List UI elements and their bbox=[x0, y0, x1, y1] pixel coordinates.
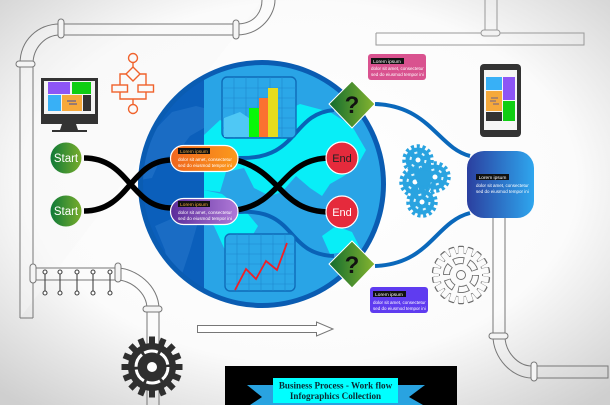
chart: bar chart panel bbox=[222, 77, 296, 138]
decision diamond upper bbox=[329, 81, 375, 128]
chart: line chart panel bbox=[225, 234, 295, 291]
callout: purple: dolor sit amet, consectetur bbox=[178, 210, 232, 215]
callout: pink: dolor sit amet, consectetur bbox=[371, 66, 424, 71]
callout: violet: sed do eiusmod tempor ini bbox=[373, 306, 426, 311]
callout: orange: dolor sit amet, consectetur bbox=[178, 157, 232, 162]
end node 2: End bbox=[332, 207, 352, 219]
callout: pink: Lorem ipsum bbox=[373, 59, 401, 65]
blue rounded info box: Lorem ipsum bbox=[479, 175, 506, 181]
callout: orange bbox=[170, 146, 238, 172]
workflow lines bbox=[84, 158, 330, 212]
pipe: top right bbox=[376, 0, 584, 45]
callout: violet: dolor sit amet, consectetur bbox=[373, 300, 426, 305]
start node 1: Start bbox=[54, 153, 79, 165]
end node 2 bbox=[326, 196, 358, 228]
pipe: top left bbox=[16, 0, 275, 318]
start node 2 bbox=[50, 196, 82, 226]
callout: purple: sed do eiusmod tempor ini bbox=[178, 216, 232, 221]
pipe: bottom left with hooks bbox=[30, 263, 162, 405]
callout: orange: Lorem ipsum bbox=[180, 149, 208, 155]
blue connector: upper bbox=[238, 110, 334, 158]
title banner: Infographics Collection bbox=[290, 391, 381, 401]
decision diamond lower bbox=[329, 241, 375, 288]
connectors to blue box bbox=[375, 104, 470, 266]
icon: desktop monitor bbox=[41, 78, 98, 132]
callout: purple bbox=[170, 198, 238, 224]
arrow bbox=[198, 322, 333, 336]
callout: pink bbox=[368, 54, 426, 80]
icon: smartphone bbox=[480, 64, 521, 137]
callout: violet: Lorem ipsum bbox=[375, 292, 403, 298]
callout: violet bbox=[370, 287, 428, 313]
map: cyan continents bbox=[204, 104, 366, 196]
icon: outline gear bbox=[432, 246, 490, 304]
icon: orange flowchart bbox=[112, 54, 154, 114]
blue connector: lower bbox=[238, 212, 334, 256]
end node 1 bbox=[326, 142, 358, 174]
globe bbox=[138, 60, 386, 308]
pipe: bottom right bbox=[489, 218, 608, 381]
icon: dark gear bbox=[122, 336, 182, 398]
icon: blue gears cluster bbox=[402, 146, 448, 216]
callout: purple: Lorem ipsum bbox=[180, 202, 208, 208]
end node 1: End bbox=[332, 153, 352, 165]
decision diamond lower: ? bbox=[345, 252, 359, 279]
map: left side continents bbox=[140, 106, 204, 180]
callout: pink: sed do eiusmod tempor ini bbox=[371, 72, 424, 77]
blue rounded info box: sed do eiusmod tempor ini bbox=[476, 189, 529, 194]
callout: orange: sed do eiusmod tempor ini bbox=[178, 163, 232, 168]
start node 2: Start bbox=[54, 206, 79, 218]
title banner bbox=[225, 366, 457, 405]
blue rounded info box bbox=[467, 151, 534, 218]
decision diamond upper: ? bbox=[345, 92, 359, 119]
blue rounded info box: dolor sit amet, consectetur bbox=[476, 183, 529, 188]
title banner: Business Process - Work flow bbox=[279, 380, 393, 390]
start node 1 bbox=[50, 142, 82, 174]
